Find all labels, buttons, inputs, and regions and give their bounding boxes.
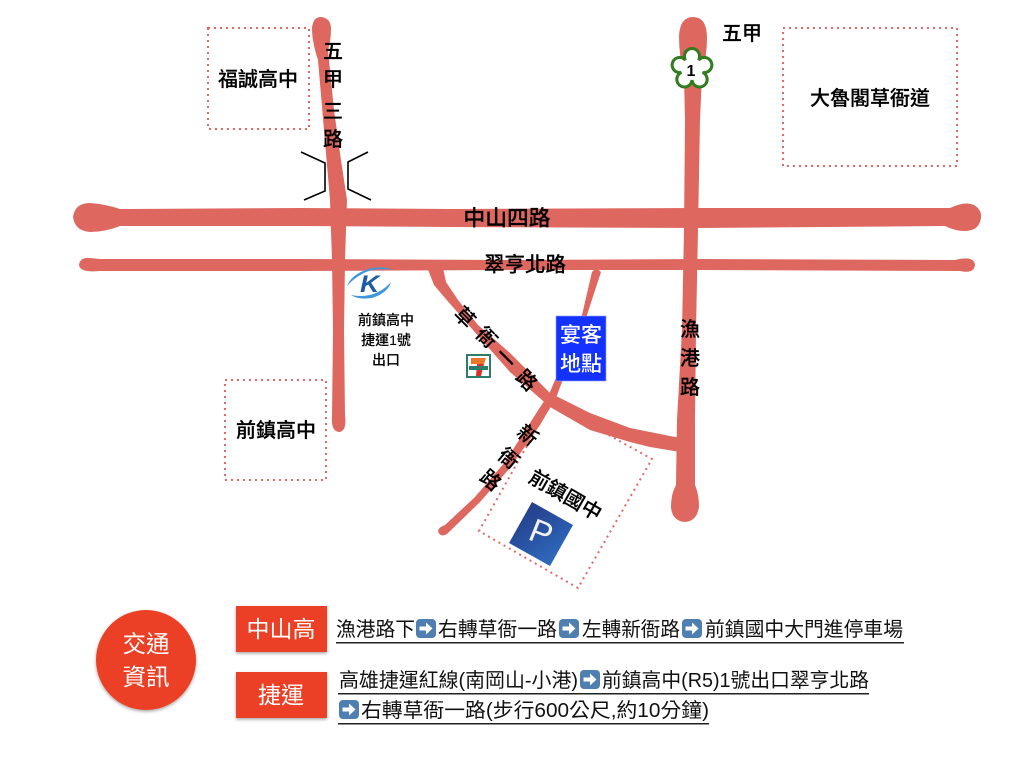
box: 福誠高中 [208, 28, 309, 129]
box: 前鎮國中 parking area [479, 403, 652, 588]
directions: 中山高: 左轉新衙路 [582, 618, 680, 641]
road: 草衙一路 [427, 267, 680, 452]
button: 中山高 [236, 606, 327, 652]
button: 捷運: 捷運 [258, 682, 304, 708]
label: 五甲三路 [323, 41, 343, 151]
road: 中山四路 [73, 203, 981, 232]
label: 新衙路 [475, 420, 542, 496]
directions: 捷運: 前鎮高中(R5)1號出口翠亨北路 [602, 669, 869, 692]
road: 五甲三路 [312, 17, 347, 432]
label: 新衙路: 新 [512, 420, 542, 451]
label: 五甲三路: 路 [323, 128, 343, 151]
icon: parking P [509, 502, 573, 566]
label: 中山四路: 中山四路 [463, 206, 551, 230]
icon: KRT logo [347, 267, 392, 299]
label: 翠亨北路: 翠亨北路 [484, 254, 566, 276]
icon: parking P: P [524, 511, 558, 554]
label: 前鎮高中捷運1號出口: 出口 [372, 352, 400, 368]
road: 漁港路 [671, 17, 707, 522]
label: 前鎮高中捷運1號出口: 捷運1號 [361, 332, 411, 348]
label: 前鎮國中: 前鎮國中 [525, 466, 606, 526]
label: 新衙路: 衙 [493, 443, 523, 474]
directions: 中山高 [336, 618, 904, 644]
directions: 捷運 [338, 669, 869, 724]
icon: highway 1 shield [672, 49, 712, 87]
box: 大魯閣草衙道: 大魯閣草衙道 [810, 87, 930, 110]
overpass brackets [301, 152, 371, 200]
directions: 中山高: 前鎮國中大門進停車場 [705, 618, 903, 641]
icon: 7-ELEVEN [466, 354, 491, 378]
label: 漁港路 [680, 318, 700, 399]
button: 中山高: 中山高 [246, 616, 316, 642]
label: 草衙一路 [449, 302, 542, 396]
callout: 宴客地點: 地點 [560, 353, 602, 376]
badge: 交通資訊: 資訊 [122, 664, 170, 690]
box: 前鎮高中 [225, 380, 326, 480]
directions: 捷運: 高雄捷運紅線(南岡山-小港) [339, 669, 578, 692]
label: 前鎮高中捷運1號出口: 前鎮高中 [358, 312, 414, 328]
badge: 交通資訊: 交通 [122, 631, 170, 657]
label: 五甲三路: 三 [323, 101, 343, 123]
label: 漁港路: 路 [680, 376, 700, 399]
callout: 宴客地點: 宴客 [560, 324, 602, 347]
road: 翠亨北路 [79, 258, 975, 272]
label: 新衙路: 路 [475, 465, 505, 496]
directions: 中山高: 右轉草衙一路 [438, 618, 557, 641]
label: 草衙一路: 草 [449, 302, 480, 333]
label: 漁港路: 港 [680, 347, 700, 370]
icon: highway 1 shield: 1 [687, 63, 696, 80]
badge: 交通資訊 [96, 610, 196, 710]
label: 五甲三路: 五 [323, 41, 343, 63]
label: 漁港路: 漁 [680, 318, 700, 341]
callout: 宴客地點 [556, 316, 606, 381]
label: 草衙一路: 衙 [471, 322, 502, 353]
directions: 中山高: 漁港路下 [336, 618, 415, 641]
box: 大魯閣草衙道 [783, 28, 957, 166]
label: 草衙一路: 路 [511, 365, 542, 396]
label: 五甲: 五甲 [722, 23, 762, 45]
label: 草衙一路: 一 [490, 344, 520, 374]
button: 捷運 [236, 672, 327, 718]
road: 新衙路 [438, 270, 601, 535]
box: 福誠高中: 福誠高中 [218, 68, 298, 91]
directions: 捷運: 右轉草衙一路(步行600公尺,約10分鐘) [361, 699, 709, 722]
box: 前鎮高中: 前鎮高中 [236, 419, 316, 442]
label: 五甲三路: 甲 [323, 69, 343, 91]
icon: KRT logo: K [360, 271, 381, 298]
label: 前鎮高中捷運1號出口 [358, 312, 414, 368]
